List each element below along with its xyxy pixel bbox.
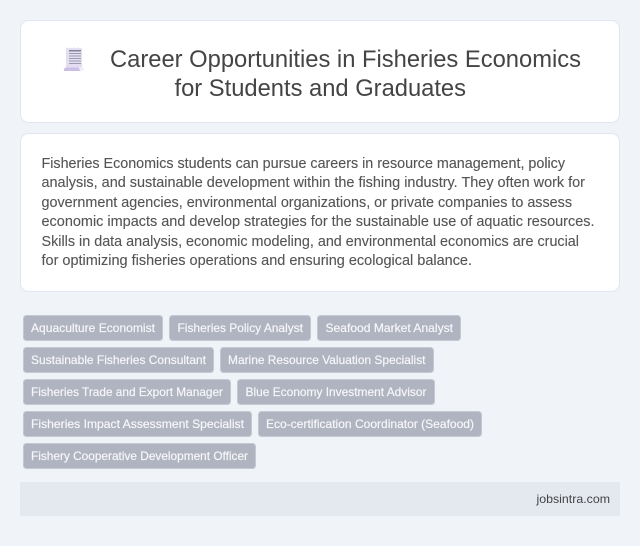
tag: Seafood Market Analyst: Seafood Market Analyst — [326, 321, 454, 335]
tag: Fisheries Impact Assessment Specialist — [24, 412, 252, 436]
footer source text: jobsintra.com — [535, 492, 610, 506]
panel: description card — [20, 134, 620, 292]
text block: description — [42, 156, 594, 269]
tag: Fisheries Policy Analyst — [170, 316, 310, 340]
text block: description: Fisheries Economics students can pursue careers in resource management, policy — [42, 156, 566, 172]
tag: Fisheries Trade and Export Manager: Fisheries Trade and Export Manager — [31, 385, 223, 399]
tag: Fisheries Impact Assessment Specialist: Fisheries Impact Assessment Specialist — [31, 417, 245, 431]
title — [110, 46, 581, 102]
tag: Fishery Cooperative Development Officer — [24, 444, 256, 468]
tag: Sustainable Fisheries Consultant: Sustainable Fisheries Consultant — [31, 353, 207, 367]
text block: description: economic impacts and develop strategies for the sustainable use of aquatic resources. — [42, 214, 594, 230]
tag: Blue Economy Investment Advisor — [238, 380, 434, 404]
text block: description: Skills in data analysis, economic modeling, and environmental economics are crucial — [42, 234, 579, 250]
tag: Blue Economy Investment Advisor: Blue Economy Investment Advisor — [246, 385, 426, 399]
text block: description: for optimizing fisheries operations and ensuring ecological balance. — [42, 253, 472, 269]
tag: Seafood Market Analyst — [318, 316, 460, 340]
tag: Aquaculture Economist: Aquaculture Economist — [31, 321, 156, 335]
title: for Students and Graduates — [174, 75, 466, 102]
text block: description: government agencies, environmental organizations, or private companies to assess — [42, 195, 572, 211]
title: Career Opportunities in Fisheries Economics — [110, 46, 581, 73]
tag: Marine Resource Valuation Specialist — [220, 348, 434, 372]
tag: Fisheries Policy Analyst: Fisheries Policy Analyst — [178, 321, 304, 335]
tag: Fisheries Trade and Export Manager — [24, 380, 230, 404]
footer bar — [20, 482, 620, 516]
tag: Eco-certification Coordinator (Seafood): Eco-certification Coordinator (Seafood) — [266, 417, 474, 431]
tag: Fishery Cooperative Development Officer: Fishery Cooperative Development Officer — [31, 449, 248, 463]
icon: paper scroll — [64, 48, 84, 71]
panel: header card — [20, 20, 620, 122]
tag: Eco-certification Coordinator (Seafood) — [258, 412, 482, 436]
tag list: career titles — [24, 316, 482, 468]
text block: description: analysis, and sustainable development within the fishing industry. They often work for — [42, 175, 585, 191]
tag: Aquaculture Economist — [24, 316, 162, 340]
tag: Sustainable Fisheries Consultant — [24, 348, 214, 372]
tag: Marine Resource Valuation Specialist: Marine Resource Valuation Specialist — [228, 353, 426, 367]
